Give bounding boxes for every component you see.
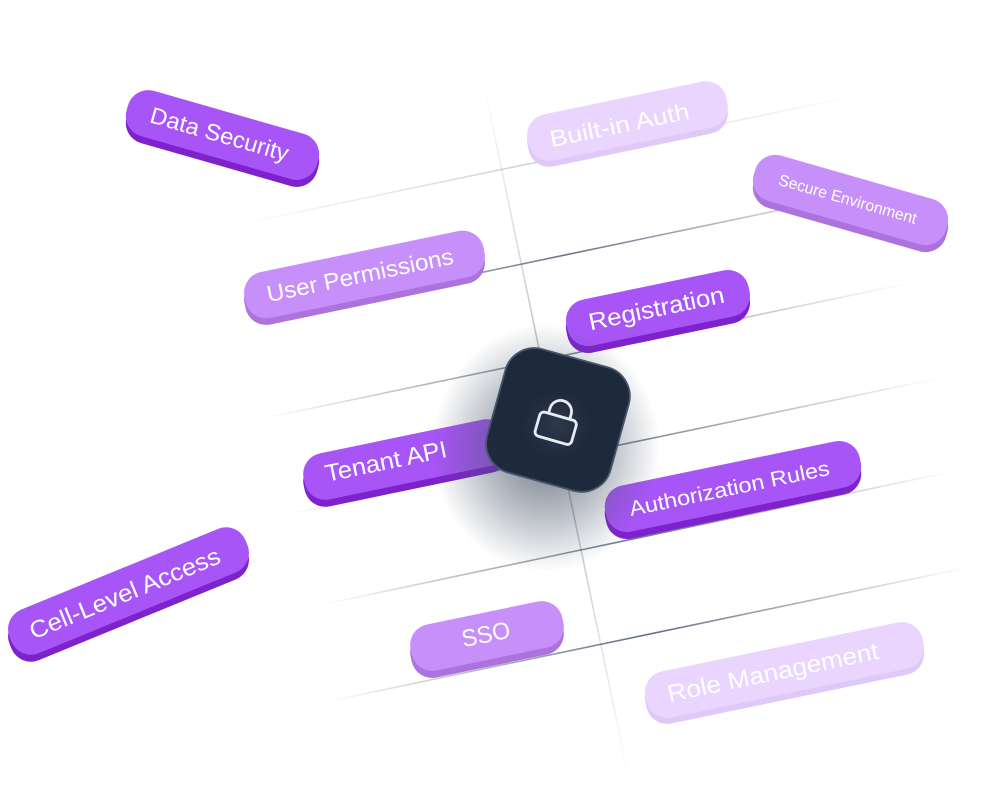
pill: Authorization Rules bbox=[601, 437, 865, 543]
pill: SSO bbox=[406, 597, 568, 682]
tile shadow bbox=[432, 324, 660, 572]
pill: Role Management bbox=[641, 618, 928, 728]
pill: Registration bbox=[562, 266, 754, 357]
pill: Data Security: Data Security bbox=[147, 102, 292, 166]
pill: Cell-Level Access: Cell-Level Access bbox=[26, 543, 224, 645]
pill: User Permissions: User Permissions bbox=[264, 243, 456, 307]
pill: User Permissions bbox=[240, 227, 489, 329]
pill: Authorization Rules: Authorization Rules bbox=[627, 457, 832, 521]
pill: Cell-Level Access bbox=[2, 521, 255, 668]
lock glow bbox=[521, 389, 593, 461]
tile body bbox=[479, 341, 637, 499]
lock tile bbox=[432, 324, 660, 572]
pill: Tenant API bbox=[299, 415, 513, 511]
pill: SSO: SSO bbox=[459, 617, 513, 653]
pill: Secure Environment bbox=[748, 150, 953, 257]
grid lines bbox=[230, 85, 970, 775]
pill: Built-in Auth bbox=[523, 77, 732, 171]
pill: Registration: Registration bbox=[586, 282, 727, 336]
pill: Built-in Auth: Built-in Auth bbox=[547, 98, 692, 152]
icon: padlock bbox=[534, 396, 582, 446]
pill: Tenant API: Tenant API bbox=[323, 436, 449, 488]
pill: Data Security bbox=[121, 85, 324, 192]
pill: Role Management: Role Management bbox=[665, 638, 881, 708]
pill: Secure Environment: Secure Environment bbox=[776, 172, 919, 228]
